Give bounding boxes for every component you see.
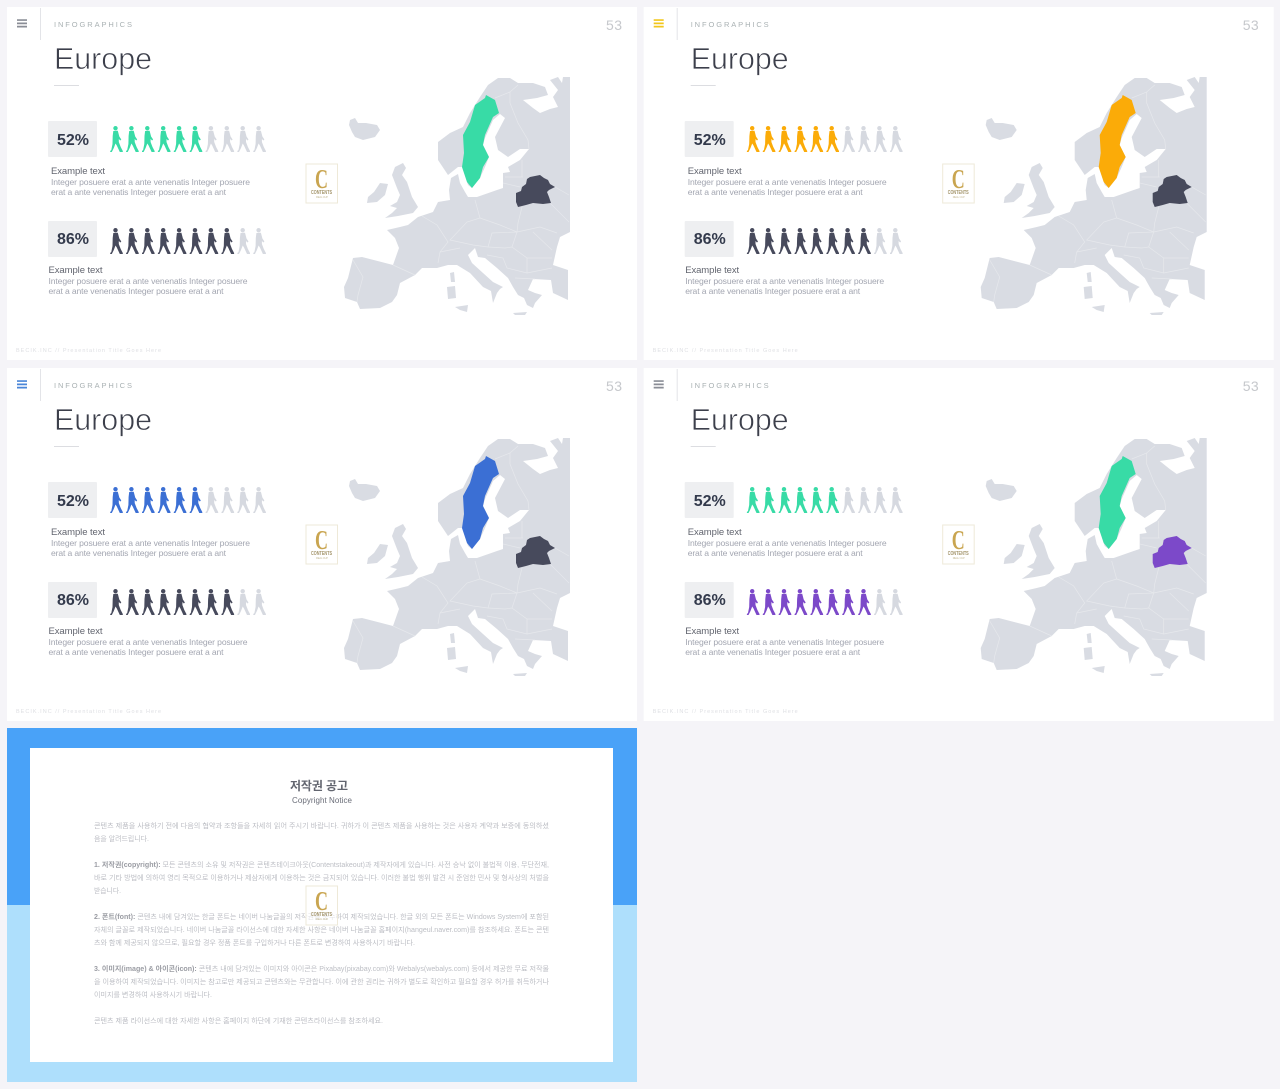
people row 52% [110,487,266,513]
heading: Europe [691,41,789,76]
logo: C [315,525,328,555]
text block 2: Example text [685,265,740,276]
text block 2: Example text [685,626,740,637]
text block 1 [688,527,887,558]
kicker: INFOGRAPHICS [691,381,769,390]
text block 1 [51,166,250,197]
kicker: INFOGRAPHICS [54,381,132,390]
page number: 53 [1243,17,1259,33]
logo: REAL CUP [316,195,328,199]
logo [306,886,338,925]
light blue lower band [7,905,637,1082]
stat box 52%: 52% [694,493,726,510]
people row 86% [110,228,266,254]
stat box 86%: 86% [694,231,726,248]
heading: Europe [54,41,152,76]
text block 1: Integer posuere erat a ante venenatis Integer posuere [688,177,887,187]
clause 3 [94,964,550,999]
map of Europe [344,77,570,315]
slide background [644,368,1274,721]
clause 1: 받습니다. [94,886,121,895]
icon: menu [17,19,27,28]
logo [943,525,974,564]
stat box 86%: 86% [57,592,89,609]
map of Europe [344,438,570,676]
logo: REAL CUP [953,195,965,199]
logo: C [952,164,965,194]
text block 2: Integer posuere erat a ante venenatis Integer posuere [685,276,884,286]
people row 86% [110,589,266,615]
text block 2 [48,626,248,657]
clause 3: 3. 이미지(image) & 아이콘(icon): 콘텐츠 내에 담겨있는 이미지와 아이콘은 Pixabay(pixabay.com)와 Webalys(webalys.com) 등에서 제공한 무료 저작물 [94,964,550,973]
text block 2: Integer posuere erat a ante venenatis Integer posuere [48,276,248,286]
clause 3: 이미지를 변경하여 사용하시기 바랍니다. [94,990,212,999]
clause 1: 바로 기타 방법에 의하여 영리 목적으로 이용하거나 제삼자에게 이용하는 것은 금지되어 있습니다. 이러한 불법 행위 발견 시 준엄한 민사 및 형사상의 처벌을 [94,873,550,882]
people row 52% [747,126,903,152]
text block 2: erat a ante venenatis Integer posuere erat a ant [48,286,224,296]
stat box 86%: 86% [57,231,89,248]
stat box 52% [48,121,97,157]
logo [306,525,338,564]
logo: C [315,164,328,194]
people row 52% [747,487,903,513]
footer: BECIK.INC // Presentation Title Goes Here [16,709,161,715]
heading: Europe [54,402,152,437]
text block 1: Example text [51,166,105,177]
text block 1: erat a ante venenatis Integer posuere erat a ant [51,187,227,197]
closing note: 콘텐츠 제품 라이선스에 대한 자세한 사항은 홈페이지 하단에 기재한 콘텐츠라이선스를 참조하세요. [94,1016,383,1025]
slide background [644,7,1274,360]
stat box 86% [48,221,97,257]
heading: Europe [691,402,789,437]
logo: CONTENTS [948,190,969,196]
logo: REAL CUP [953,556,965,560]
text block 2 [685,626,884,657]
clause 1: 1. 저작권(copyright): 모든 콘텐츠의 소유 및 저작권은 콘텐츠테이크아웃(Contentstakeout)과 제작자에게 있습니다. 사전 승낙 없이 불법적 이용, 무단전재, [94,860,549,869]
icon: menu [654,19,664,28]
kicker: INFOGRAPHICS [691,20,769,29]
text block 1: erat a ante venenatis Integer posuere erat a ant [688,548,863,558]
map of Europe [981,438,1207,676]
page number: 53 [606,17,622,33]
page number: 53 [1243,378,1259,394]
clause 2: 자체의 글꼴로 제작되었습니다. 네이버 나눔글꼴 라이선스에 대한 자세한 사항은 네이버 나눔글꼴 홈페이지(hangeul.naver.com)를 참조하세요. 폰트는 콘텐 [94,925,549,934]
logo: CONTENTS [948,551,969,557]
panel: Europe slide orange [644,7,1274,360]
stat box 52% [48,482,97,518]
clause 2 [94,912,549,947]
text block 2: Example text [48,626,103,637]
logo: REAL CUP [316,556,328,560]
logo [306,164,338,203]
text block 1: Example text [688,166,742,177]
text block 2: Example text [48,265,103,276]
logo [943,164,974,203]
kicker: INFOGRAPHICS [54,20,132,29]
text block 2 [685,265,884,296]
footer: BECIK.INC // Presentation Title Goes Here [653,709,798,715]
clause 3: 을 이용하여 제작되었습니다. 이미지는 참고로만 제공되고 콘텐츠와는 무관합니다. 이에 관한 권리는 귀하가 별도로 확인하고 필요할 경우 허가를 취득하거나 [94,977,550,986]
text block 1: erat a ante venenatis Integer posuere erat a ant [51,548,227,558]
text block 2 [48,265,248,296]
logo: CONTENTS [311,190,333,196]
clause 1 [94,860,550,895]
people row 86% [747,228,903,254]
notice intro [94,821,550,843]
page number: 53 [606,378,622,394]
stat box 86% [685,221,734,257]
map of Europe [981,77,1207,315]
logo: C [952,525,965,555]
slide background [7,368,637,721]
panel: Europe slide green [7,7,637,360]
stat box 52% [685,121,734,157]
white notice card [30,748,613,1062]
footer: BECIK.INC // Presentation Title Goes Here [16,348,161,354]
notice intro: 음을 알려드립니다. [94,834,149,843]
icon: menu [654,380,664,388]
notice intro: 콘텐츠 제품을 사용하기 전에 다음의 협약과 조항들을 자세히 읽어 주시기 바랍니다. 귀하가 이 콘텐츠 제품을 사용하는 것은 사용자 계약과 보증에 동의하셨 [94,821,550,830]
people row 86% [747,589,903,615]
notice title: 저작권 공고 [290,778,348,793]
slide background [7,7,637,360]
panel: Europe slide blue [7,368,637,721]
clause 2: 츠와 함께 제공되지 않으므로, 필요할 경우 정품 폰트를 구입하거나 다른 폰트로 변경하여 사용하시기 바랍니다. [94,938,415,947]
icon: menu [17,380,27,388]
text block 1: Example text [51,527,105,538]
text block 1 [688,166,887,197]
footer: BECIK.INC // Presentation Title Goes Here [653,348,798,354]
stat box 52%: 52% [694,132,726,149]
people row 52% [110,126,266,152]
stat box 52% [685,482,734,518]
text block 1: Integer posuere erat a ante venenatis Integer posuere [51,177,250,187]
text block 2: erat a ante venenatis Integer posuere erat a ant [685,647,861,657]
stat box 86% [685,582,734,618]
clause 2: 2. 폰트(font): 콘텐츠 내에 담겨있는 한글 폰트는 네이버 나눔글꼴의 저작권을 준수하여 제작되었습니다. 한글 외의 모든 폰트는 Windows System에 포함된 [94,912,549,921]
stat box 86% [48,582,97,618]
panel: Europe slide green and purple [644,368,1274,721]
text block 1: erat a ante venenatis Integer posuere erat a ant [688,187,863,197]
text block 2: erat a ante venenatis Integer posuere erat a ant [685,286,861,296]
stat box 52%: 52% [57,132,89,149]
text block 1: Integer posuere erat a ante venenatis Integer posuere [51,538,250,548]
blue upper band [7,728,637,905]
panel: copyright notice [7,728,637,1082]
stat box 86%: 86% [694,592,726,609]
logo: CONTENTS [311,551,333,557]
text block 2: Integer posuere erat a ante venenatis Integer posuere [48,637,248,647]
logo: CONTENTS [311,912,333,918]
logo: REAL CUP [316,917,328,921]
text block 1: Example text [688,527,742,538]
text block 1 [51,527,250,558]
logo: C [315,886,328,916]
stat box 52%: 52% [57,493,89,510]
text block 1: Integer posuere erat a ante venenatis Integer posuere [688,538,887,548]
text block 2: erat a ante venenatis Integer posuere erat a ant [48,647,224,657]
notice subtitle: Copyright Notice [292,796,353,805]
text block 2: Integer posuere erat a ante venenatis Integer posuere [685,637,884,647]
